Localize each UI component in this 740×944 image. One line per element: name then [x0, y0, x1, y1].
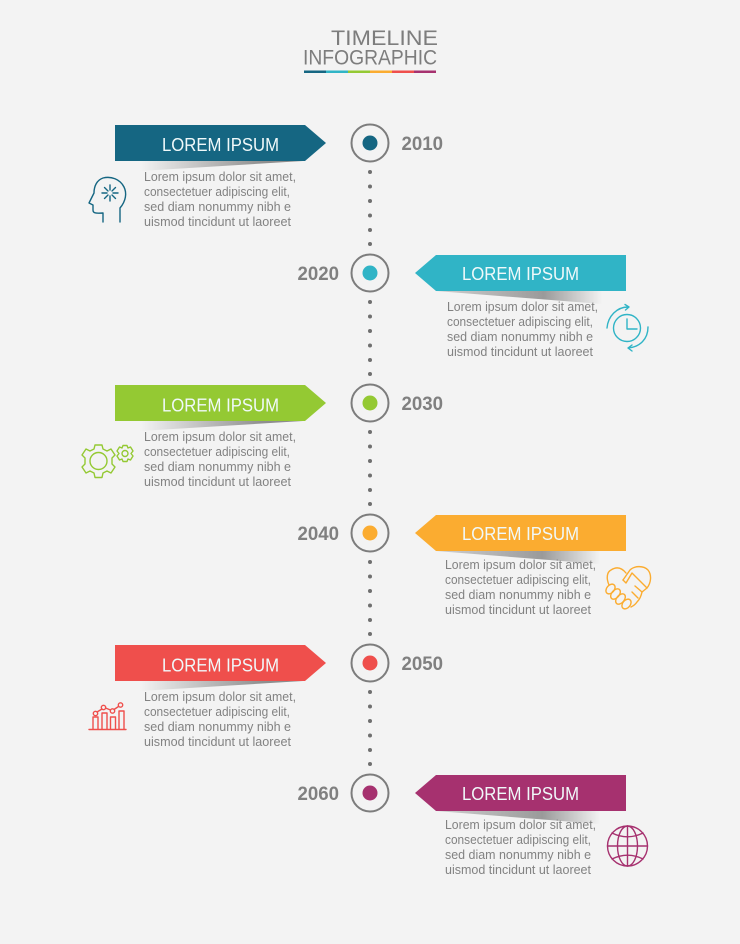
title: INFOGRAPHIC	[303, 46, 437, 70]
body text: Lorem ipsum dolor sit amet,	[144, 689, 296, 704]
year: 2040	[298, 524, 339, 545]
body text	[144, 429, 296, 489]
body text: sed diam nonummy nibh e	[144, 459, 291, 474]
body text: uismod tincidunt ut laoreet	[445, 862, 591, 877]
body text: sed diam nonummy nibh e	[445, 587, 591, 602]
title: TIMELINE	[331, 27, 438, 50]
panel: 2020	[298, 254, 648, 359]
banner shadow	[140, 421, 303, 431]
banner shadow	[436, 551, 600, 564]
title colour bar	[304, 70, 436, 73]
title	[303, 27, 438, 73]
body text	[144, 689, 296, 749]
marker	[352, 514, 388, 552]
body text: sed diam nonummy nibh e	[445, 847, 591, 862]
body text: consectetuer adipiscing elit,	[447, 314, 593, 329]
body text: consectetuer adipiscing elit,	[144, 704, 290, 719]
year: 2010	[402, 134, 443, 155]
year: 2050	[402, 654, 443, 675]
body text: uismod tincidunt ut laoreet	[445, 602, 591, 617]
body text: consectetuer adipiscing elit,	[445, 572, 591, 587]
body text: consectetuer adipiscing elit,	[144, 184, 290, 199]
banner shadow	[436, 811, 600, 824]
banner	[115, 125, 326, 161]
body text: Lorem ipsum dolor sit amet,	[445, 817, 596, 832]
icon: clock with arrows	[607, 304, 648, 351]
banner heading: LOREM IPSUM	[162, 394, 279, 416]
icon: globe	[608, 826, 648, 866]
icon: handshake heart	[604, 567, 651, 611]
body text: consectetuer adipiscing elit,	[445, 832, 591, 847]
banner heading: LOREM IPSUM	[462, 263, 579, 284]
panel: 2050	[89, 644, 443, 749]
panel: 2030	[82, 384, 443, 489]
icon: gears	[82, 445, 133, 478]
body text: Lorem ipsum dolor sit amet,	[144, 429, 296, 444]
banner	[115, 385, 326, 421]
body text	[445, 817, 596, 877]
body text: Lorem ipsum dolor sit amet,	[447, 299, 598, 314]
marker	[352, 384, 388, 422]
body text: uismod tincidunt ut laoreet	[144, 474, 291, 489]
icon: head	[89, 177, 126, 222]
body text: Lorem ipsum dolor sit amet,	[445, 557, 596, 572]
banner	[415, 515, 626, 551]
body text	[445, 557, 596, 617]
body text: sed diam nonummy nibh e	[144, 719, 291, 734]
banner heading: LOREM IPSUM	[462, 523, 579, 544]
year: 2060	[298, 784, 339, 805]
banner	[415, 255, 626, 291]
marker	[352, 254, 388, 292]
year: 2030	[402, 394, 443, 415]
dotted timeline	[368, 170, 372, 766]
body text: consectetuer adipiscing elit,	[144, 444, 290, 459]
year: 2020	[298, 264, 339, 285]
banner heading: LOREM IPSUM	[462, 783, 579, 804]
body text: uismod tincidunt ut laoreet	[144, 734, 291, 749]
body text: Lorem ipsum dolor sit amet,	[144, 169, 296, 184]
body text	[447, 299, 598, 359]
banner	[415, 775, 626, 811]
banner heading: LOREM IPSUM	[162, 654, 279, 676]
marker	[352, 644, 388, 682]
panel: 2040	[298, 514, 651, 617]
body text: uismod tincidunt ut laoreet	[447, 344, 593, 359]
icon: bar chart with line	[89, 703, 126, 730]
banner shadow	[140, 161, 303, 171]
panel: 2010	[89, 124, 443, 229]
body text: sed diam nonummy nibh e	[144, 199, 291, 214]
banner heading: LOREM IPSUM	[162, 134, 279, 155]
body text: uismod tincidunt ut laoreet	[144, 214, 291, 229]
banner shadow	[436, 291, 602, 304]
marker	[352, 124, 388, 162]
panel: 2060	[298, 774, 648, 877]
banner	[115, 645, 326, 681]
body text: sed diam nonummy nibh e	[447, 329, 593, 344]
banner shadow	[140, 681, 303, 691]
marker	[352, 774, 388, 812]
body text	[144, 169, 296, 229]
